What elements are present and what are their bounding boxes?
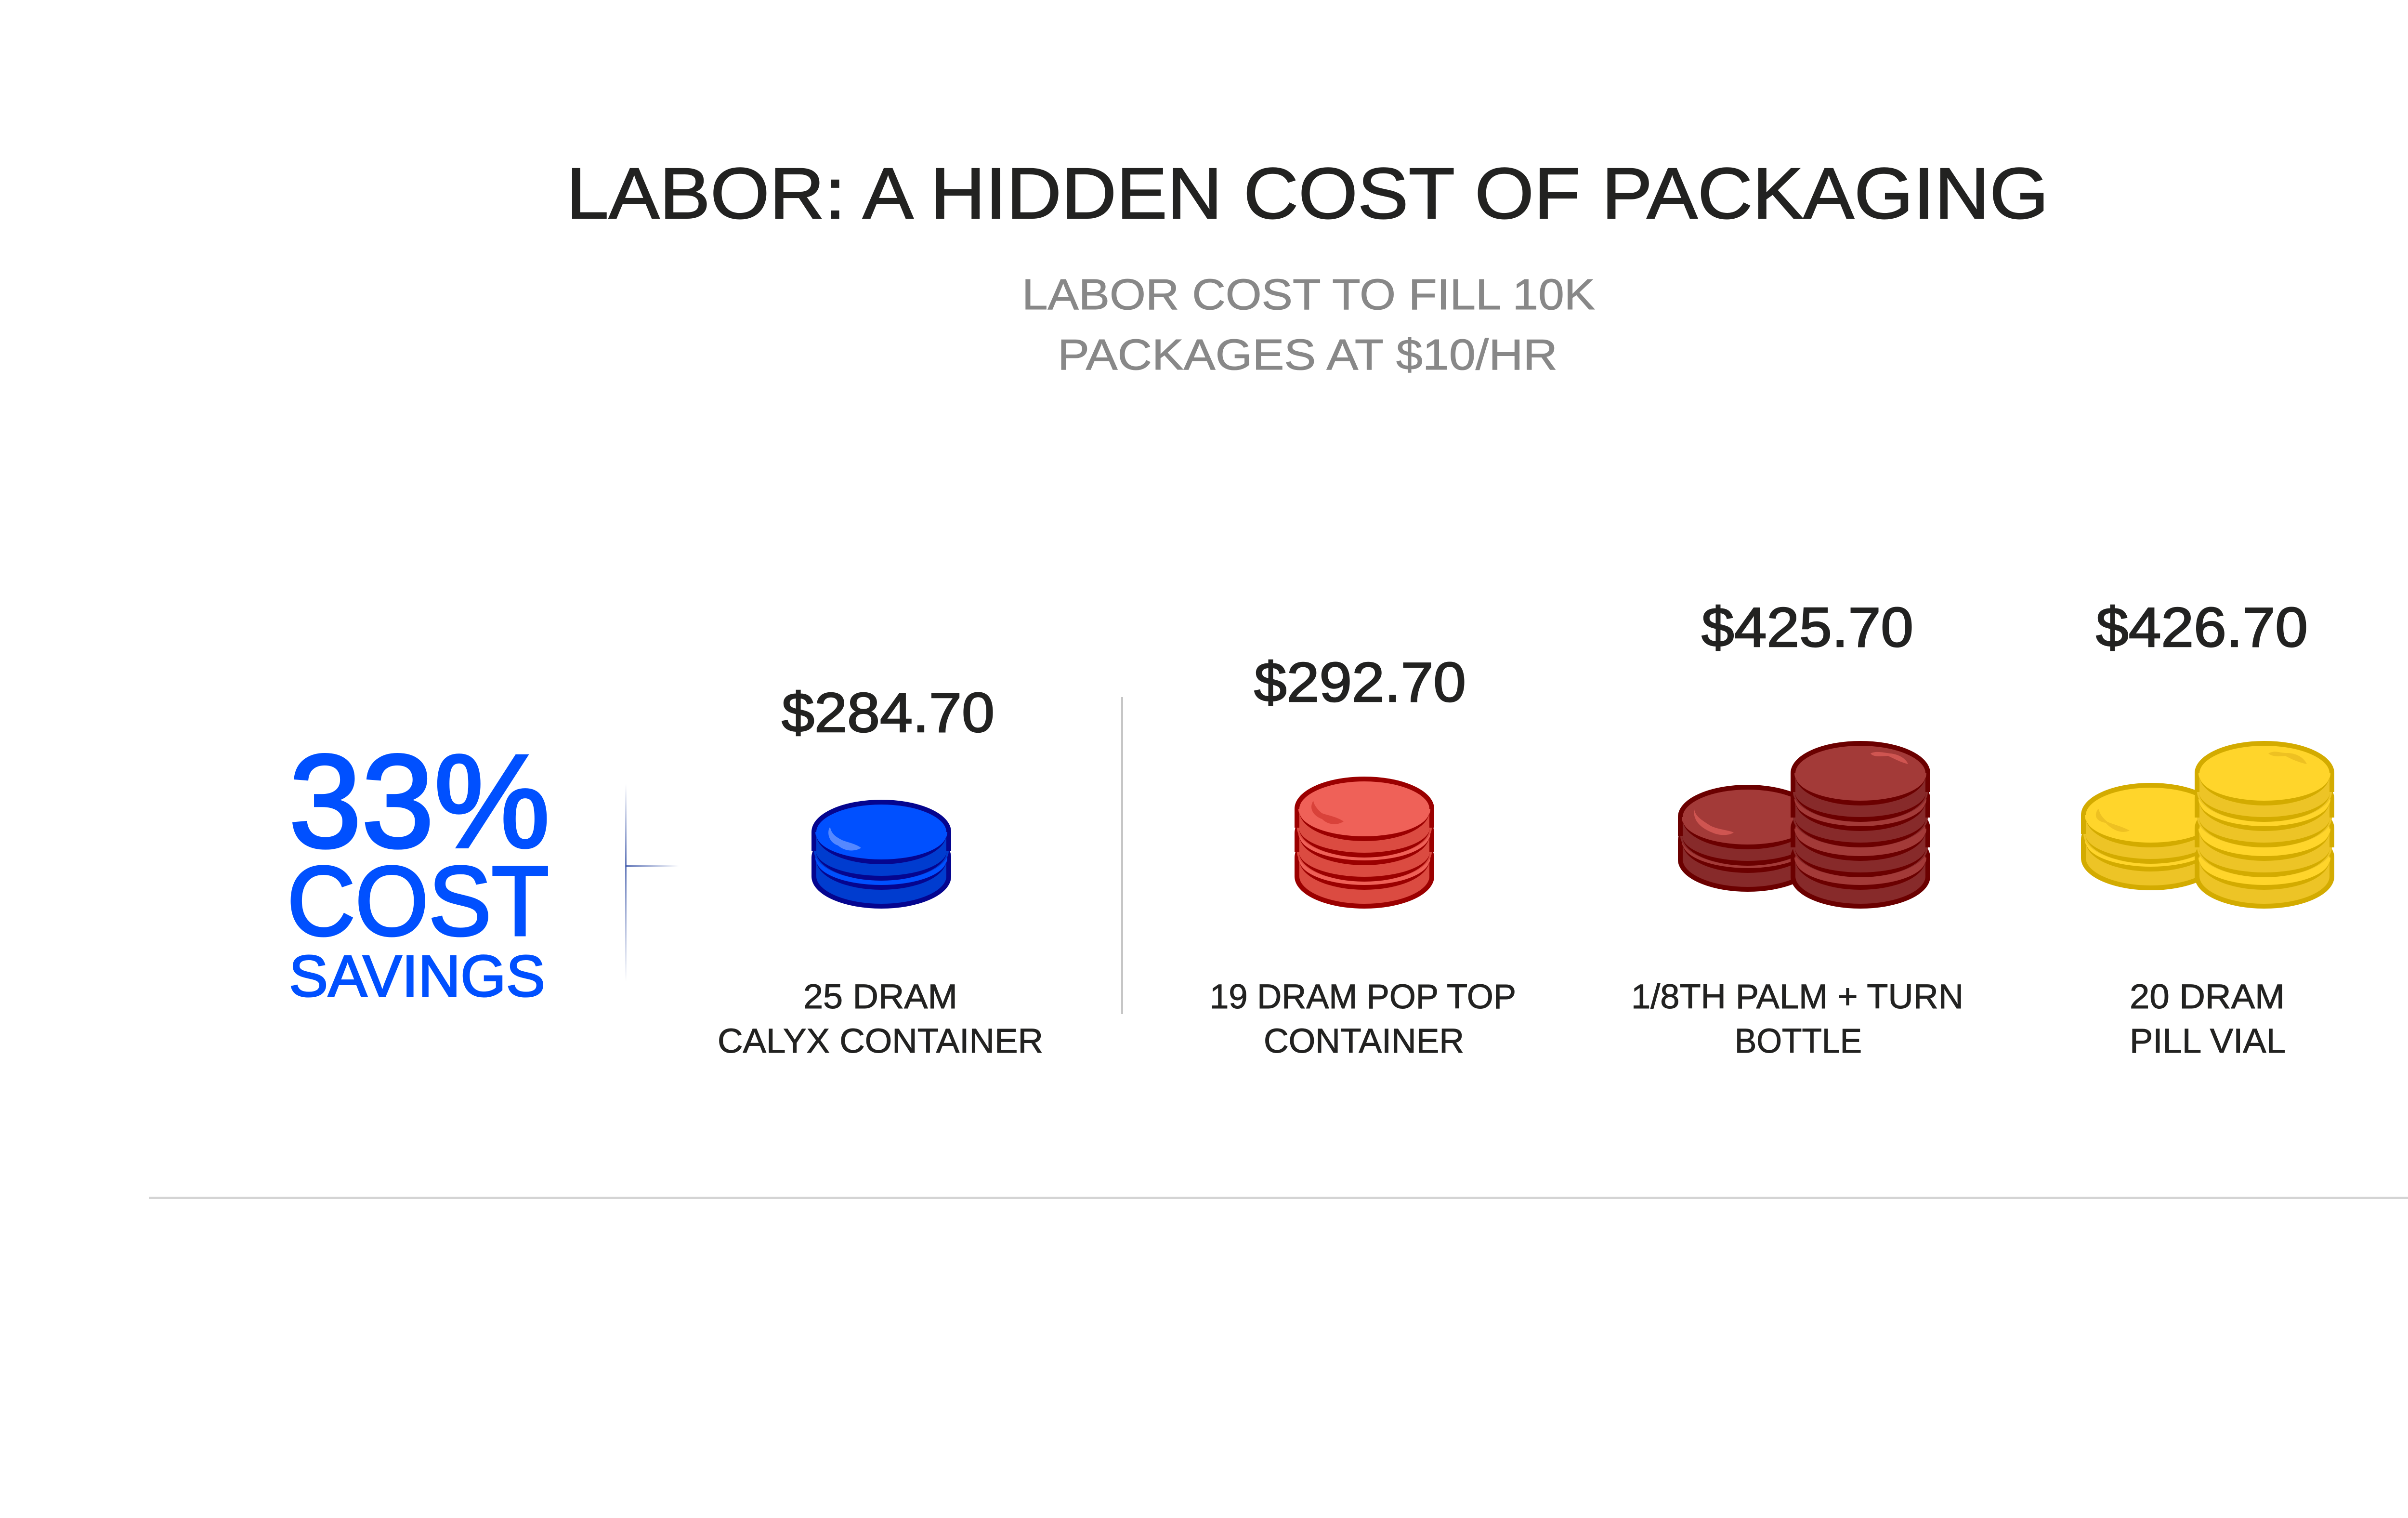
icon: red coin stack [1297, 779, 1432, 906]
label: 25 dram calyx container: 25 DRAM [803, 978, 957, 1016]
label: 25 dram calyx container [718, 978, 1043, 1060]
subtitle [1022, 271, 1595, 379]
title: LABOR: A HIDDEN COST OF PACKAGING [566, 153, 2049, 234]
price: 1/8th palm + turn: $425.70 [1701, 596, 1913, 659]
price: 19 dram: $292.70 [1254, 651, 1466, 713]
column divider [1121, 697, 1123, 1014]
label: 1/8th palm + turn bottle [1631, 978, 1963, 1060]
callout connector [625, 784, 679, 982]
label: 20 dram pill vial [2130, 978, 2286, 1060]
icon: blue coin stack [814, 802, 949, 906]
callout: 33% cost savings [287, 727, 550, 1009]
subtitle: LABOR COST TO FILL 10K [1022, 271, 1595, 319]
label: 19 dram pop top container: CONTAINER [1264, 1022, 1464, 1060]
icon: maroon coin stacks [1680, 743, 1928, 906]
icon: gold coin stacks [2083, 743, 2332, 906]
price: 25 dram: $284.70 [782, 681, 995, 744]
label: 20 dram pill vial: 20 DRAM [2130, 978, 2285, 1016]
callout: 33% cost savings: 33% [289, 727, 550, 875]
label: 19 dram pop top container: 19 DRAM POP TOP [1210, 978, 1516, 1016]
callout: 33% cost savings: SAVINGS [289, 943, 545, 1009]
bottom rule [149, 1197, 2408, 1199]
label: 20 dram pill vial: PILL VIAL [2130, 1022, 2286, 1060]
label: 25 dram calyx container: CALYX CONTAINER [718, 1022, 1043, 1060]
label: 1/8th palm + turn bottle: BOTTLE [1735, 1022, 1862, 1060]
price: 20 dram: $426.70 [2096, 596, 2308, 659]
label: 1/8th palm + turn bottle: 1/8TH PALM + TURN [1631, 978, 1963, 1016]
subtitle: PACKAGES AT $10/HR [1058, 331, 1557, 379]
label: 19 dram pop top container [1210, 978, 1516, 1060]
callout: 33% cost savings: COST [287, 846, 549, 956]
